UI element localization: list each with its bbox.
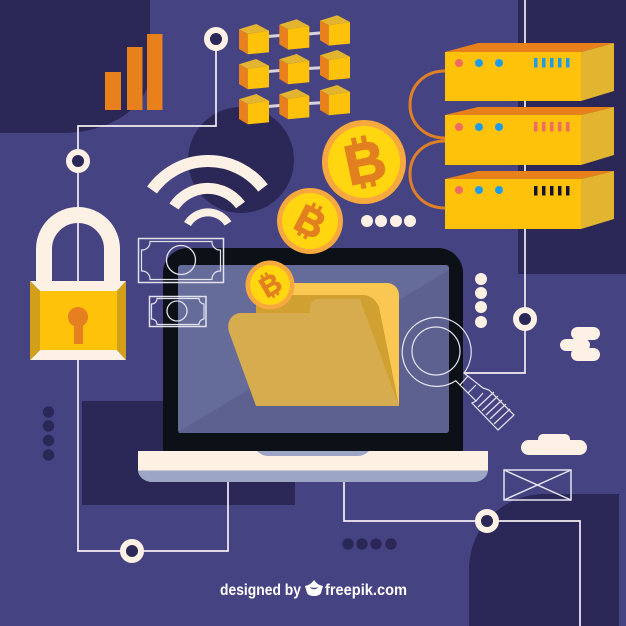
server 1 [445,43,614,101]
coin: large: B [339,127,391,197]
server stack [445,43,614,229]
icon: banknote large [138,238,224,282]
dots: top row [361,215,416,227]
coin: medium: B [288,197,332,248]
circuit nodes [69,30,534,560]
icon: padlock [30,215,126,360]
icon: cloud stacked [560,327,600,361]
laptop [138,248,488,482]
server cables [410,71,445,208]
laptop frame [163,248,463,451]
credit: designed by freepik: freepik.com [325,582,407,599]
coin: small [246,260,294,310]
coin: small: B [254,267,287,304]
bar chart [105,34,162,110]
icon: wifi [152,161,263,224]
laptop screen [178,265,449,433]
server 2 [445,107,614,165]
icon: magnifying glass [402,317,514,430]
coin: medium [277,188,343,254]
coin: large [322,120,406,204]
dots: bottom row [342,538,397,550]
icon: banknote small [150,296,206,326]
dots: right column [475,273,487,328]
icon: freepik logo [305,580,323,596]
credit: designed by freepik: designed by [220,582,301,599]
blockchain cubes [239,15,350,124]
icon: cloud [521,434,587,455]
dots: left column [43,406,54,461]
icon: envelope [504,470,571,500]
credit: designed by freepik [220,580,407,599]
folder [228,283,399,406]
laptop base [138,451,488,482]
server 3 [445,171,614,229]
